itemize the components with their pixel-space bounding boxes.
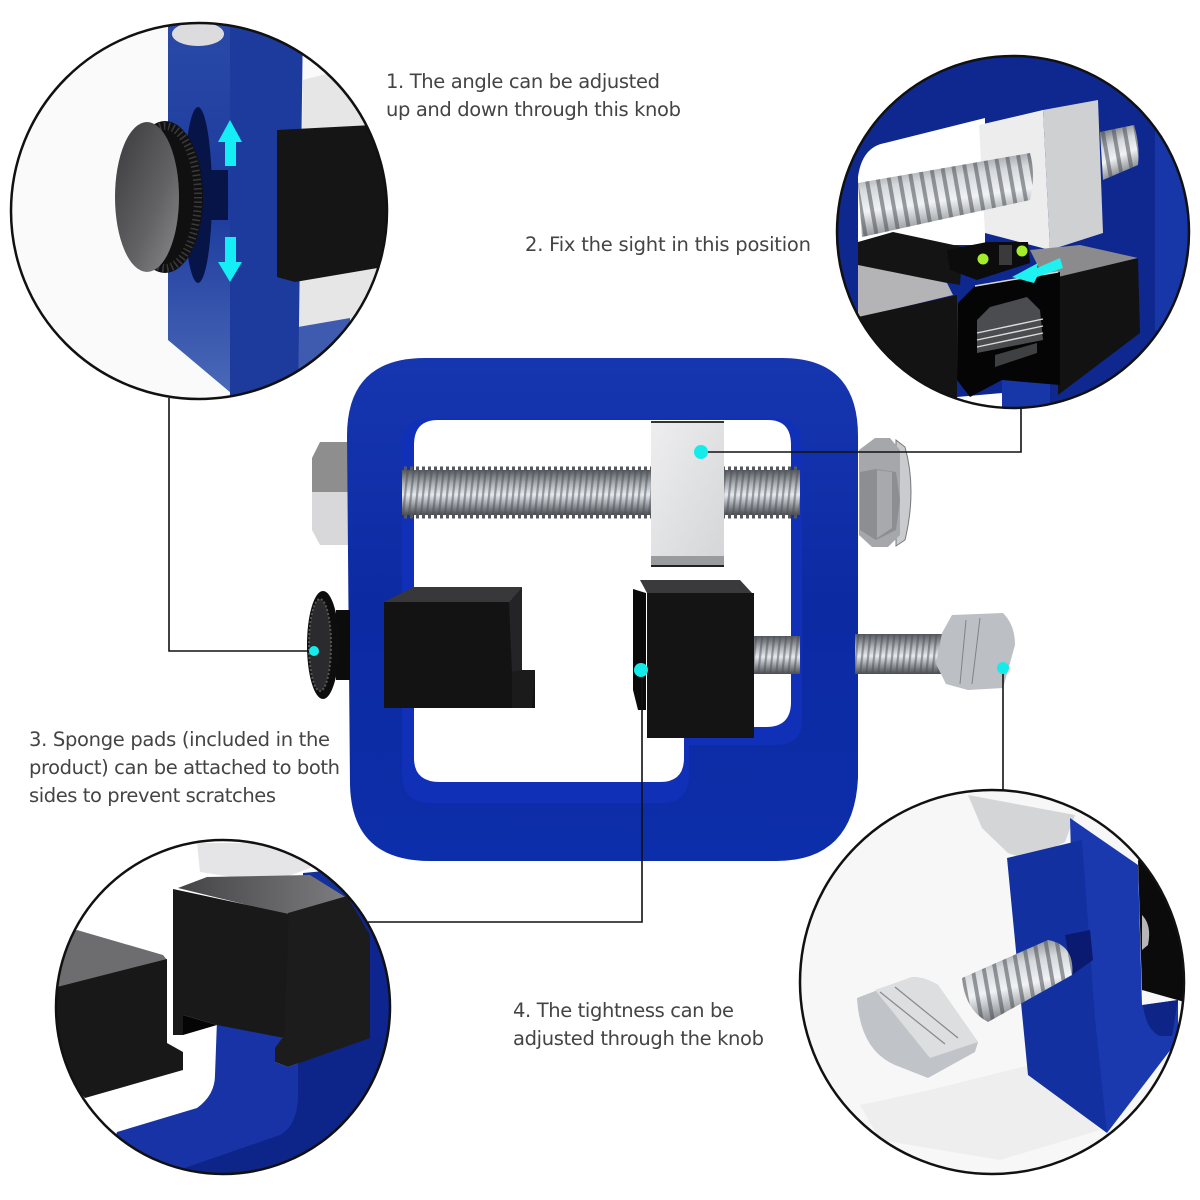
main tool frame <box>307 358 1015 861</box>
text: callout 4: adjusted through the knob <box>513 1027 764 1050</box>
icon: down arrow <box>218 237 242 282</box>
threaded rod <box>402 468 800 516</box>
text: callout 3 <box>29 728 340 807</box>
left hex bolt head <box>312 442 348 545</box>
tightening screw <box>754 613 1015 690</box>
callout circle 4: tightness knob <box>857 792 1183 1160</box>
text: callout 1: 1. The angle can be adjusted <box>386 70 660 93</box>
text: callout 3: sides to prevent scratches <box>29 784 276 807</box>
left black jaw <box>384 587 535 708</box>
back bar and gray top <box>858 232 963 285</box>
marker dots <box>309 445 1009 677</box>
angle knob <box>307 591 350 699</box>
text: callout 1 <box>386 70 681 121</box>
bottom gaps <box>1002 380 1050 407</box>
callout circle 2: sight position <box>830 50 1200 415</box>
right nut <box>859 438 911 547</box>
connector lines <box>169 398 1021 922</box>
frame: blue body <box>347 358 858 861</box>
text: callout 4 <box>513 999 764 1050</box>
slide plate <box>957 272 1060 397</box>
block <box>979 110 1050 250</box>
callout circle 3: sponge pads <box>50 835 395 1180</box>
left block <box>58 930 166 987</box>
text: callout 3: 3. Sponge pads (included in the <box>29 728 330 751</box>
frame: inner recess <box>402 418 802 803</box>
sight <box>947 242 1030 280</box>
right black jaw with sponge <box>633 580 754 738</box>
threaded rod <box>858 153 1033 237</box>
right block <box>1058 258 1140 395</box>
right block <box>178 875 347 915</box>
text: callout 4: 4. The tightness can be <box>513 999 734 1022</box>
white opening behind rod <box>858 118 985 245</box>
text: callout 1: up and down through this knob <box>386 98 681 121</box>
threaded rod stub <box>1100 125 1138 180</box>
icon: up arrow <box>218 120 242 166</box>
frame: see-through opening <box>414 420 791 782</box>
silver sliding block <box>651 421 724 567</box>
text: callout 2: 2. Fix the sight in this position <box>525 233 811 256</box>
text: callout 3: product) can be attached to both <box>29 756 340 779</box>
callout circle 1: angle knob <box>115 24 386 396</box>
icon: pointing arrow <box>1012 258 1063 283</box>
